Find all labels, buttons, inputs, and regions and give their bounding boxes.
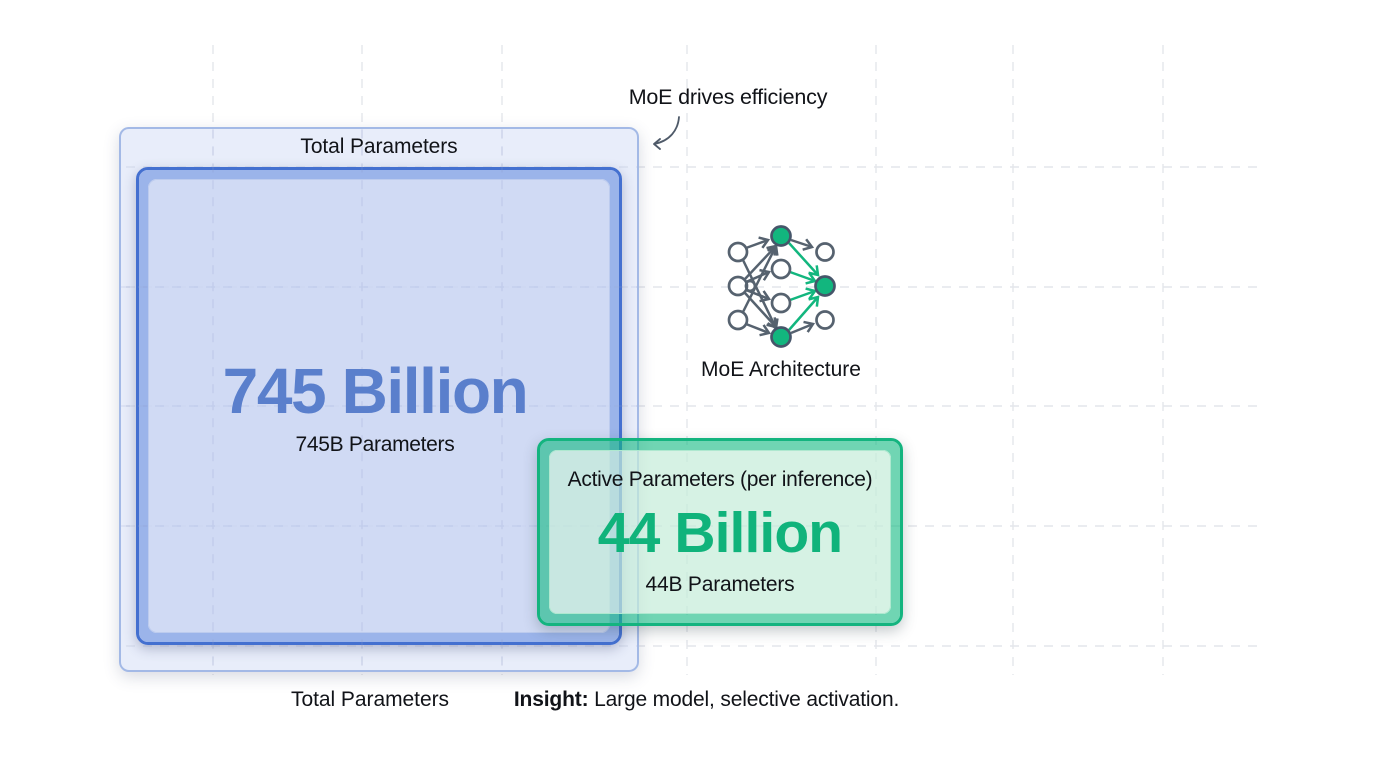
label: active parameters: Active Parameters (per inference) <box>568 468 872 491</box>
panel: active parameters outer ring <box>537 438 903 626</box>
panel: total parameters middle ring <box>136 167 622 645</box>
annotation: MoE drives efficiency: MoE drives efficiency <box>629 85 827 109</box>
heading: total parameters top label: Total Parameters <box>300 135 458 158</box>
label: MoE Architecture: MoE Architecture <box>701 358 861 381</box>
big number: 745 Billion: 745 Billion <box>223 355 527 427</box>
panel: active parameters inner fill <box>549 450 891 614</box>
panel: total parameters inner fill <box>148 179 610 633</box>
caption: 44B Parameters: 44B Parameters <box>646 573 794 596</box>
arrow: annotation curve <box>653 116 680 150</box>
grid lines showing through the blue panel <box>121 129 637 665</box>
icon: MoE network <box>728 225 836 348</box>
big number: 44 Billion: 44 Billion <box>598 501 842 565</box>
insight text: Insight: Large model, selective activation. <box>514 688 899 711</box>
label: total parameters bottom: Total Parameters <box>291 688 449 711</box>
panel: total parameters outer box <box>119 127 639 672</box>
caption: 745B Parameters: 745B Parameters <box>296 433 454 456</box>
